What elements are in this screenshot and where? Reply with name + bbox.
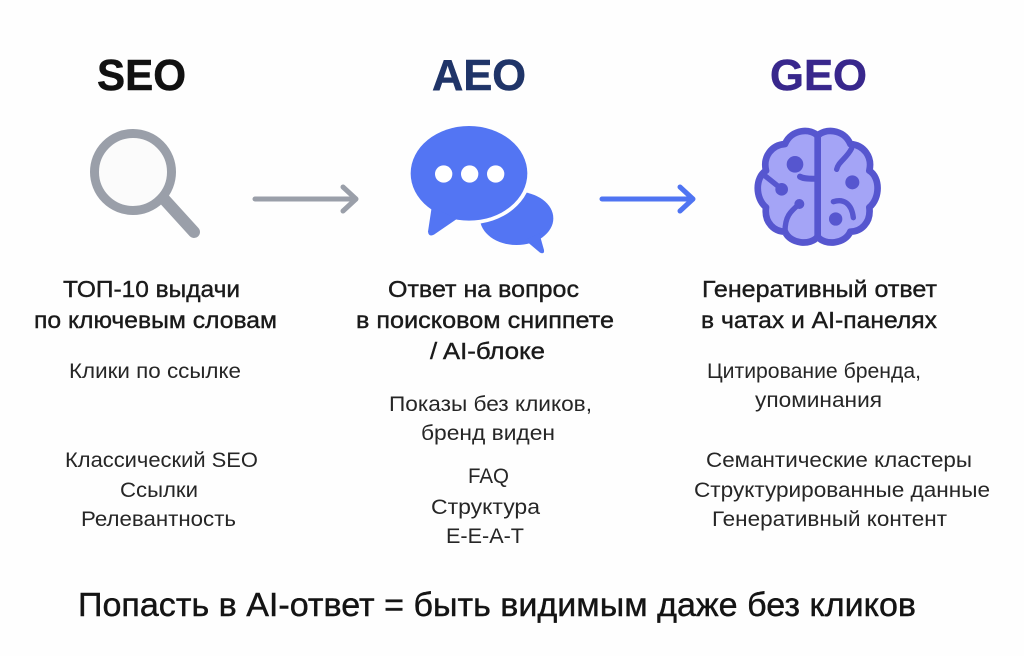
arrow: SEO to AEO xyxy=(255,187,356,211)
heading: AEO: AEO xyxy=(432,51,526,100)
text: AEO result: Показы без кликов, xyxy=(389,393,592,416)
column: GEO xyxy=(694,51,990,531)
column: AEO xyxy=(356,51,614,548)
subtitle: SEO: ТОП-10 выдачи xyxy=(63,276,240,302)
subtitle: AEO: / AI-блоке xyxy=(430,338,545,364)
list: SEO factors: Классический SEO xyxy=(65,449,258,472)
column: SEO xyxy=(34,51,277,531)
icon: speech bubbles xyxy=(407,122,553,253)
list: GEO factors xyxy=(694,449,990,531)
list: GEO factors: Структурированные данные xyxy=(694,479,990,502)
heading: SEO: SEO xyxy=(97,51,186,100)
icon: brain xyxy=(758,131,878,243)
heading: GEO: GEO xyxy=(770,51,867,100)
list: AEO factors: E-E-A-T xyxy=(446,525,524,548)
subtitle: AEO: Ответ на вопрос xyxy=(388,276,579,302)
subtitle: GEO: в чатах и AI-панелях xyxy=(701,307,937,333)
text: AEO result xyxy=(389,393,592,445)
subtitle: AEO xyxy=(356,276,614,364)
list: GEO factors: Генеративный контент xyxy=(712,508,947,531)
list: AEO factors: FAQ xyxy=(468,465,509,488)
subtitle: SEO: по ключевым словам xyxy=(34,307,277,333)
text: GEO result xyxy=(707,360,921,412)
list: SEO factors xyxy=(65,449,258,531)
bottom conclusion: Попасть в AI-ответ = быть видимым даже без кликов xyxy=(78,586,916,623)
subtitle: GEO xyxy=(701,276,937,333)
text: AEO result: бренд виден xyxy=(421,422,555,445)
icon: magnifying glass xyxy=(94,134,194,232)
text: GEO result: Цитирование бренда, xyxy=(707,360,921,383)
arrow: AEO to GEO xyxy=(602,187,693,211)
text: SEO result: Клики по ссылке xyxy=(69,360,241,383)
list: AEO factors xyxy=(431,465,540,548)
list: AEO factors: Структура xyxy=(431,496,540,519)
list: SEO factors: Релевантность xyxy=(81,508,236,531)
list: GEO factors: Семантические кластеры xyxy=(706,449,972,472)
subtitle: GEO: Генеративный ответ xyxy=(702,276,937,302)
list: SEO factors: Ссылки xyxy=(120,479,198,502)
subtitle: AEO: в поисковом сниппете xyxy=(356,307,614,333)
subtitle: SEO xyxy=(34,276,277,333)
text: GEO result: упоминания xyxy=(755,389,882,412)
